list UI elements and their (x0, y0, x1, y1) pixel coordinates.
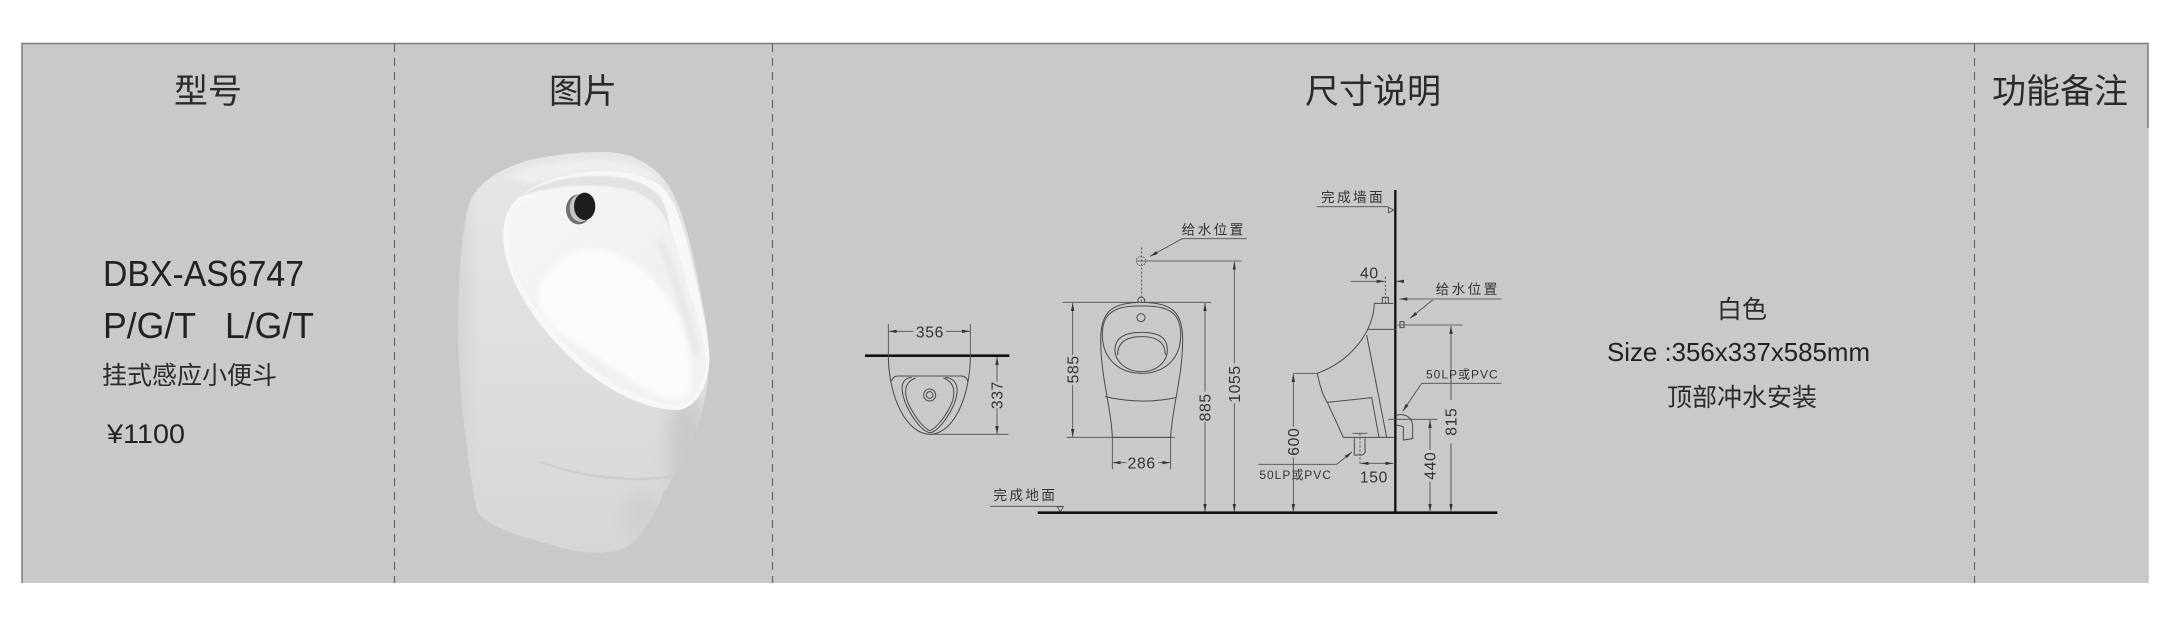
text block: model details: DBX-AS6747 (103, 253, 304, 294)
diagram: side view with wall and dimensions: 600 (1286, 428, 1303, 456)
diagram: plan view with dimensions 356 and 337 (865, 324, 1009, 434)
label: finished wall: 完成墙面 (1321, 186, 1385, 206)
text block: model details (102, 253, 314, 449)
diagram: plan view with dimensions 356 and 337: 356 (916, 324, 944, 341)
diagram: front view with dimensions 585, 885, 1055, 286: 585 (1065, 355, 1082, 383)
urinal bowl (503, 171, 709, 410)
label: finished floor (990, 484, 1063, 512)
label: 50LP or PVC right: 50LP或PVC (1426, 368, 1499, 382)
diagram: plan view with dimensions 356 and 337: 337 (990, 381, 1007, 409)
diagram: front view with dimensions 585, 885, 1055, 286: 1055 (1227, 365, 1244, 403)
label: finished wall (1317, 186, 1394, 213)
label: 50LP or PVC left (1258, 452, 1352, 482)
diagram: side view with wall and dimensions: 150 (1360, 470, 1388, 487)
diagram: front view with dimensions 585, 885, 1055, 286: 885 (1198, 393, 1215, 421)
text block: model details: 挂式感应小便斗 (102, 356, 277, 392)
heading: model: 型号 (174, 64, 242, 113)
label: water supply position side (1399, 278, 1502, 318)
line: finished floor (1038, 511, 1497, 514)
diagram: side view with wall and dimensions: 40 (1360, 265, 1379, 282)
label: 50LP or PVC left: 50LP或PVC (1259, 468, 1332, 482)
diagram: front view with dimensions 585, 885, 1055, 286: 286 (1128, 455, 1156, 472)
icon: flush sensor (566, 193, 595, 224)
label: water supply position: 给水位置 (1182, 219, 1246, 239)
heading: dimensions: 尺寸说明 (1305, 64, 1441, 113)
diagram: side view with wall and dimensions: 440 (1423, 452, 1440, 480)
heading: picture: 图片 (549, 64, 617, 113)
text block: model details: ¥1100 (106, 419, 185, 449)
diagram: front view with dimensions 585, 885, 1055, 286 (990, 219, 1247, 512)
text block: colour, size and installation (1607, 290, 1870, 414)
text block: colour, size and installation: 白色 (1717, 290, 1767, 326)
product photo: wall-hung urinal (450, 152, 709, 553)
heading: function notes: 功能备注 (1992, 64, 2128, 113)
text block: colour, size and installation: Size :356x337x585mm (1607, 337, 1870, 367)
text block: model details: P/G/T L/G/T (103, 305, 314, 346)
diagram: side view with wall and dimensions (1258, 186, 1502, 513)
label: 50LP or PVC right (1403, 368, 1502, 411)
label: water supply position (1150, 219, 1247, 256)
text block: colour, size and installation: 顶部冲水安装 (1667, 378, 1817, 414)
label: finished floor: 完成地面 (993, 484, 1057, 504)
diagram: side view with wall and dimensions: 815 (1444, 408, 1461, 436)
label: water supply position side: 给水位置 (1436, 278, 1500, 298)
